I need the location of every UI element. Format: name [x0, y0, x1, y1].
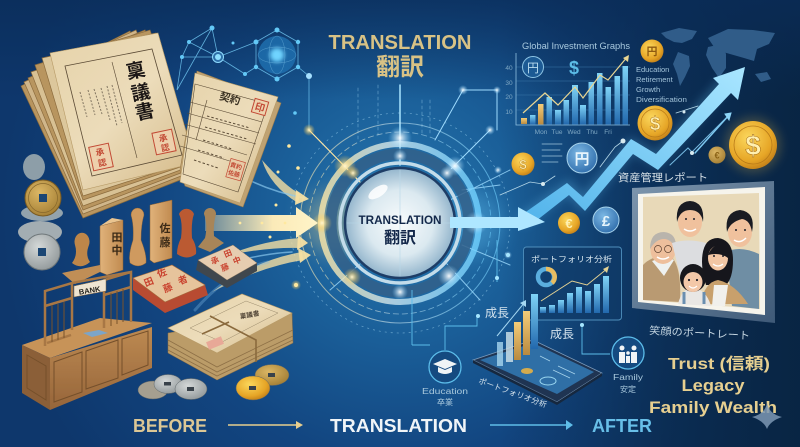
tablet caption: ポートフォリオ分析: [477, 375, 548, 410]
bank counter: BANK: [78, 284, 102, 297]
family: father: [672, 201, 712, 275]
arrow: translation to after: [490, 420, 573, 430]
education label: [422, 387, 468, 407]
values text: [649, 354, 777, 417]
3D growth bars: [497, 342, 503, 366]
portrait caption: 笑顔のポートレート: [649, 324, 750, 342]
sparkle mark: [752, 403, 782, 429]
title: TRANSLATION: [328, 32, 472, 54]
stacked proposal documents: 議: [129, 80, 152, 106]
coins: 円: [646, 45, 658, 58]
red seal box: 者: [176, 273, 190, 288]
stacked proposal documents: 認: [97, 157, 108, 169]
label list: Education: [636, 65, 669, 74]
family: mother: [700, 238, 748, 306]
contract document: 印: [253, 100, 266, 115]
red seal box: [133, 265, 208, 313]
contract document: 責約: [229, 161, 243, 172]
coins: $: [519, 157, 527, 172]
knob stamps: [62, 208, 224, 284]
values text: Family Wealth: [649, 398, 777, 417]
growth labels: 成長: [485, 306, 509, 320]
asset report label: 資産管理レポート: [618, 171, 708, 184]
seal 田中: [100, 218, 123, 275]
red seal box: 藤: [161, 281, 175, 296]
thin side trends: [500, 106, 731, 195]
chart: global investment graphs: 円: [527, 61, 539, 75]
family: grandfather: [643, 232, 680, 302]
seal 佐藤: 佐: [160, 221, 170, 235]
axis labels: 10: [505, 109, 513, 116]
seal 田中: 田: [112, 231, 122, 244]
dark seal box: 田: [223, 248, 233, 259]
education label: 卒業: [437, 397, 453, 407]
left gold flow arrows: [195, 144, 322, 310]
dark seal box: [196, 245, 257, 288]
currency marks: [522, 56, 544, 78]
coins: £: [602, 213, 611, 230]
axis labels: [505, 65, 612, 136]
stacked proposal documents: 承: [95, 146, 106, 158]
axis labels: 40: [505, 65, 513, 72]
bottom flow: translation: TRANSLATION: [330, 416, 467, 436]
panel: portfolio analysis: [524, 247, 622, 320]
lower sheets: [21, 30, 195, 218]
chart title: Global Investment Graphs: [522, 41, 631, 51]
title: 翻訳: [376, 54, 424, 81]
stacked proposal documents: 認: [160, 142, 171, 154]
world map: [661, 28, 775, 86]
hub label: 翻訳: [384, 229, 416, 247]
coins: $: [650, 114, 661, 135]
arrow: before to translation: [228, 421, 303, 429]
family label: Family: [613, 373, 643, 382]
growth labels: 成長: [550, 327, 574, 341]
values text: Trust (信頼): [668, 354, 770, 373]
axis labels: Thu: [586, 129, 598, 136]
tied document stack: 稟議書: [239, 308, 260, 321]
icon: family: [612, 337, 644, 369]
label list: Diversification: [636, 95, 687, 104]
axis labels: Tue: [552, 129, 563, 136]
seal 佐藤: 藤: [160, 235, 170, 249]
network: globe top-left: [177, 26, 312, 130]
coins: €: [565, 216, 573, 231]
axis labels: Fri: [604, 129, 612, 136]
stacked proposal documents: 承: [158, 132, 169, 144]
coins: $: [745, 130, 761, 161]
rising blue arrow: [440, 67, 745, 231]
stacked proposal documents: [21, 30, 195, 218]
family label: [613, 373, 643, 394]
axis labels: Mon: [535, 129, 548, 136]
central translation hub: [290, 85, 512, 333]
family label: 安定: [620, 385, 636, 394]
growth labels: [485, 306, 574, 341]
dark seal box: 中: [231, 254, 242, 266]
dark seal box: 藤: [219, 261, 230, 273]
bottom coins: [138, 364, 289, 400]
axis labels: 30: [505, 80, 513, 87]
stacked proposal documents: 稟: [124, 58, 147, 84]
bottom flow: after: AFTER: [592, 416, 652, 436]
bars: [521, 66, 628, 124]
horizontal output arrow: [450, 207, 545, 231]
red seal box: 佐: [155, 266, 169, 281]
icon: education: [429, 351, 461, 383]
seal 田中: 中: [112, 243, 122, 257]
seal 佐藤: [150, 200, 172, 263]
contract document: 契約: [218, 89, 242, 108]
family: son: [726, 210, 759, 309]
coins: €: [714, 150, 720, 160]
chart: global investment graphs: [505, 41, 631, 136]
axis labels: 20: [505, 94, 513, 101]
axis labels: Wed: [567, 129, 581, 136]
hub label: TRANSLATION: [358, 215, 442, 227]
dark seal box: 承: [210, 255, 220, 266]
old coins left: [18, 154, 63, 270]
connector lines: [412, 240, 610, 354]
tied document stack: [168, 294, 293, 380]
values text: Legacy: [682, 376, 745, 395]
tablet with rising bars: [473, 294, 602, 405]
label list: [636, 65, 687, 104]
contract document: [180, 71, 281, 207]
stacked proposal documents: 書: [133, 98, 156, 125]
red seal box: 田: [143, 276, 156, 290]
hub label: [358, 215, 442, 247]
title: [328, 32, 472, 81]
contract document: 佐藤: [227, 168, 241, 179]
top sheet: [50, 33, 195, 190]
family: child: [678, 264, 711, 306]
wooden name seals: [62, 200, 257, 313]
donut chart: [538, 269, 555, 285]
bottom flow: before: BEFORE: [133, 416, 207, 436]
label list: Growth: [636, 85, 660, 94]
coins: [512, 40, 781, 234]
label list: Retirement: [636, 75, 674, 84]
chart: global investment graphs: $: [569, 58, 579, 78]
family portrait frame: [632, 181, 775, 323]
rays behind the hub: [303, 85, 510, 300]
coins: 円: [574, 151, 590, 168]
panel bars: [540, 276, 609, 313]
bank counter: [22, 272, 152, 410]
education label: Education: [422, 387, 468, 396]
panel heading: ポートフォリオ分析: [531, 254, 612, 264]
